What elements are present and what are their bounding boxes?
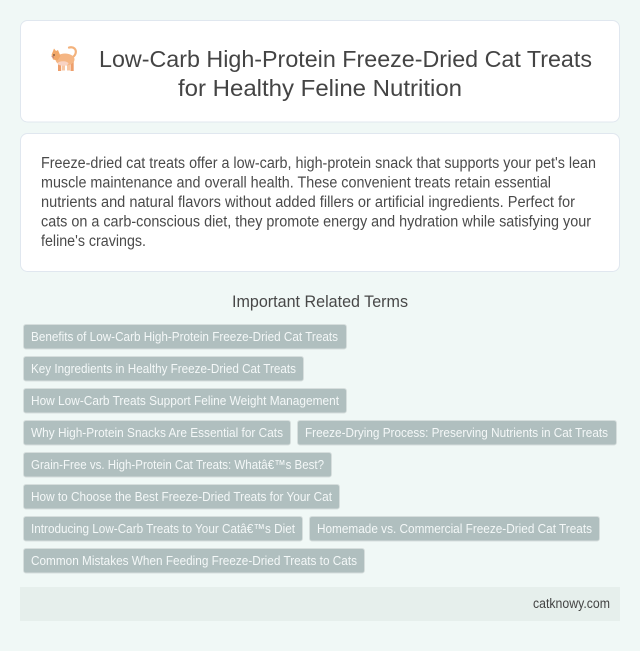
tag: introducing treats bbox=[24, 516, 302, 541]
tag: common mistakes bbox=[24, 548, 364, 573]
heading: important related terms: Important Related Terms bbox=[232, 293, 408, 311]
tag: freeze-drying process: Freeze-Drying Process: Preserving Nutrients in Cat Treats bbox=[305, 425, 608, 440]
text block: description: feline's cravings. bbox=[41, 233, 146, 250]
tag: high-protein snacks bbox=[24, 420, 290, 445]
text block: description: cats on a carb-conscious diet, they promote energy and hydration while satisfying your bbox=[41, 214, 591, 230]
tag: freeze-drying process bbox=[298, 420, 616, 445]
icon: orange cat bbox=[51, 47, 76, 71]
text block: description: nutrients and natural flavors without added fillers or artificial ingredients. Perfect for bbox=[41, 194, 575, 211]
tag: weight management: How Low-Carb Treats Support Feline Weight Management bbox=[31, 393, 339, 408]
tag: benefits: Benefits of Low-Carb High-Protein Freeze-Dried Cat Treats bbox=[31, 329, 338, 344]
tag: weight management bbox=[24, 388, 346, 413]
footer bar bbox=[20, 587, 620, 621]
panel: description card bbox=[20, 134, 620, 272]
tag list: related terms bbox=[24, 324, 616, 573]
tag: grain-free comparison: Grain-Free vs. High-Protein Cat Treats: Whatâ€™s Best? bbox=[31, 457, 324, 472]
text block: description bbox=[41, 155, 596, 250]
heading: title: Low-Carb High-Protein Freeze-Dried Cat Treats bbox=[99, 46, 592, 72]
tag: how to choose bbox=[24, 484, 340, 509]
tag: benefits bbox=[24, 324, 346, 349]
tag: homemade vs commercial bbox=[310, 516, 600, 541]
tag: introducing treats: Introducing Low-Carb Treats to Your Catâ€™s Diet bbox=[31, 521, 295, 536]
tag: grain-free comparison bbox=[24, 452, 332, 477]
tag: key ingredients: Key Ingredients in Healthy Freeze-Dried Cat Treats bbox=[31, 361, 296, 376]
text block: description: muscle maintenance and overall health. These convenient treats retain essential bbox=[41, 174, 551, 192]
text block: description: Freeze-dried cat treats offer a low-carb, high-protein snack that supports your pet's lean bbox=[41, 155, 596, 172]
tag: high-protein snacks: Why High-Protein Snacks Are Essential for Cats bbox=[31, 425, 283, 440]
tag: key ingredients bbox=[24, 356, 304, 381]
tag: homemade vs commercial: Homemade vs. Commercial Freeze-Dried Cat Treats bbox=[317, 521, 592, 536]
tag: how to choose: How to Choose the Best Freeze-Dried Treats for Your Cat bbox=[31, 489, 332, 504]
footer source text: catknowy.com bbox=[533, 596, 610, 611]
heading: title: for Healthy Feline Nutrition bbox=[178, 75, 462, 101]
heading: title bbox=[99, 46, 592, 101]
tag: common mistakes: Common Mistakes When Feeding Freeze-Dried Treats to Cats bbox=[31, 553, 357, 568]
panel: title card bbox=[20, 20, 620, 122]
